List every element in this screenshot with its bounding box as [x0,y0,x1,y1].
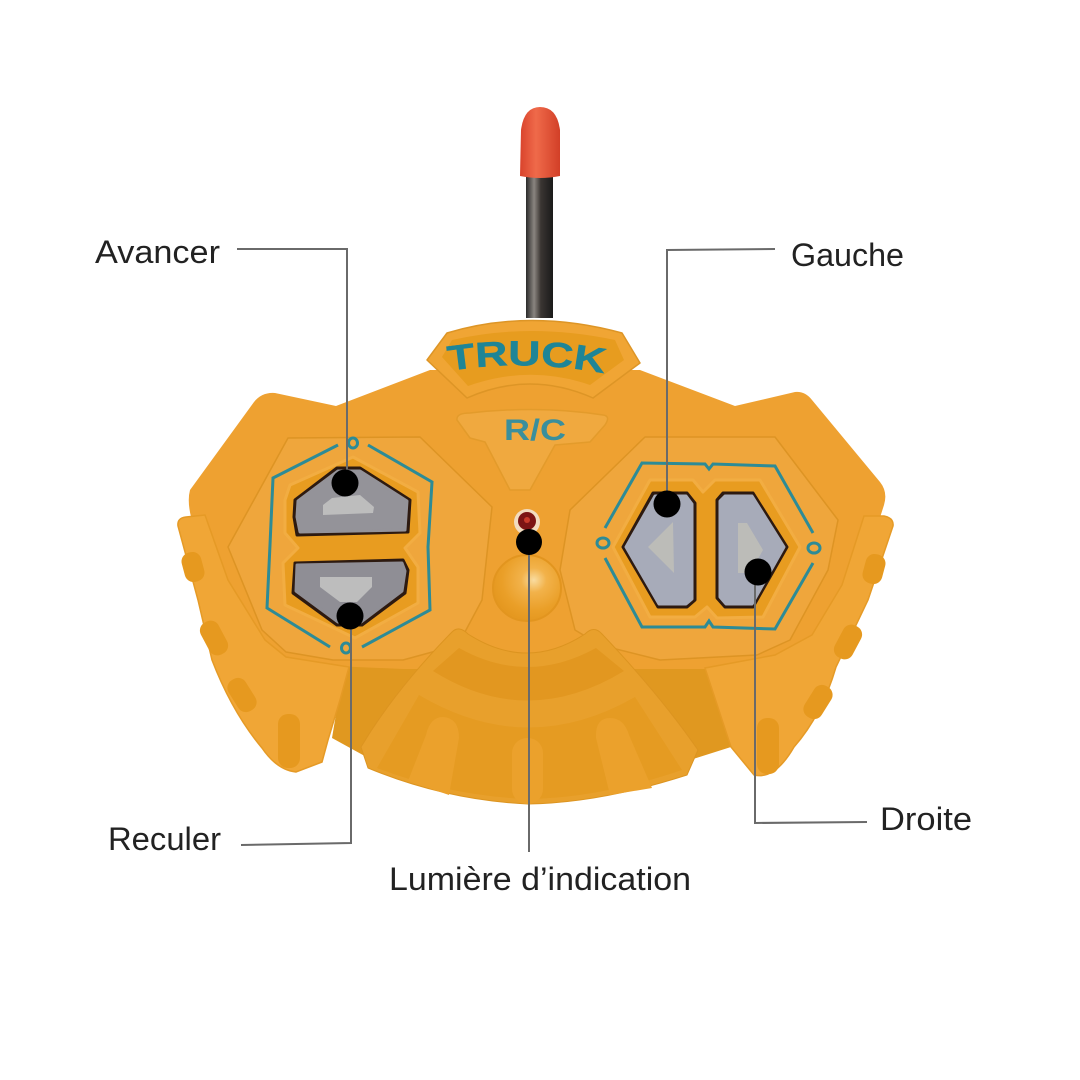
left wing [178,515,349,772]
label: Reculer [108,602,364,857]
R/C plate [457,409,608,490]
label: Gauche [654,237,904,518]
remote control [177,107,894,804]
truck badge [426,320,641,398]
button: forward [294,468,410,535]
antenna [520,107,560,318]
left button group [267,438,432,653]
label: Avancer [95,234,358,496]
label: Avancer: Avancer [95,234,220,270]
label: Lumière d'indication [389,529,691,897]
label: Gauche: Gauche [791,237,904,273]
left control panel [228,437,492,660]
wing studs [179,550,888,774]
left teal outline [267,438,432,653]
truck label: TRUCK [446,341,608,374]
label: Lumière d'indication: Lumière d’indication [389,861,691,897]
right control panel [560,437,838,660]
right teal outline [597,463,820,629]
R/C label: R/C [504,414,566,447]
main body [189,370,885,669]
right button group [597,463,820,629]
centre fan grip [361,629,698,804]
round yellow button [493,555,561,621]
fan ribs [408,717,652,804]
button: right [717,493,787,607]
indicator light [514,509,540,535]
button: left [623,493,695,607]
button: backward [293,560,408,625]
label: Droite: Droite [880,801,972,837]
left button housing [283,457,420,638]
label: Reculer: Reculer [108,821,221,857]
right button housing [613,480,800,618]
right wing [705,516,893,776]
label: Droite [744,558,972,837]
lower body shadow sections [332,660,731,760]
